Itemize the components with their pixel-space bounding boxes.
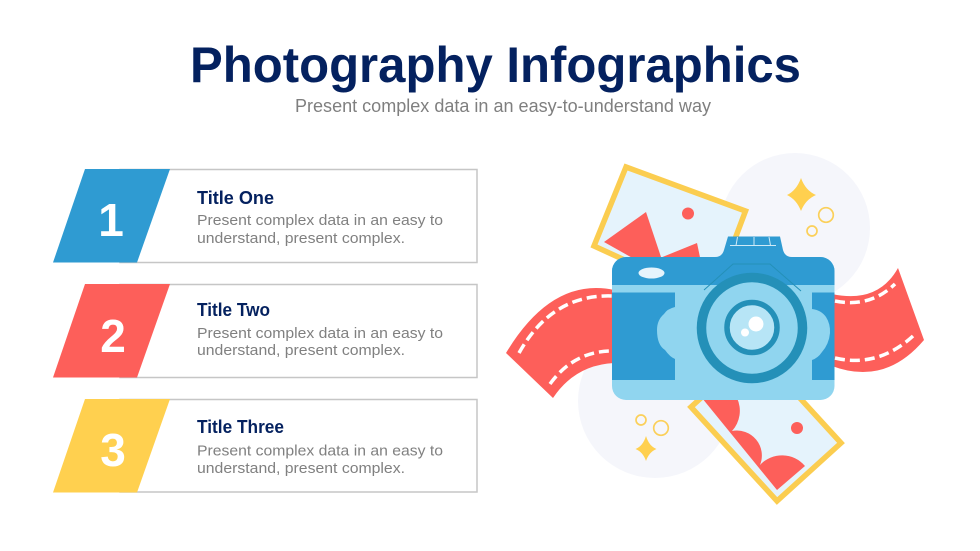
text block: item one: Present complex data in an easy to xyxy=(197,212,443,229)
heading: title three: Title Three xyxy=(197,417,284,437)
grip panel: right xyxy=(812,292,834,380)
panel: item two xyxy=(53,284,477,378)
text block: item two: understand, present complex. xyxy=(197,342,405,359)
camera top band xyxy=(612,257,834,285)
film strip: left xyxy=(506,288,614,398)
text block: item three xyxy=(197,442,443,477)
number tab: 2: 2 xyxy=(100,310,126,362)
camera top prism xyxy=(715,236,792,257)
text block: item one: understand, present complex. xyxy=(197,230,405,247)
camera body xyxy=(612,257,834,400)
heading: title two: Title Two xyxy=(197,300,270,320)
icon: lower sparkle xyxy=(636,415,668,461)
background circle: lower left xyxy=(578,324,732,478)
camera illustration xyxy=(506,153,924,501)
prism outline xyxy=(704,264,801,291)
number tab: 1 xyxy=(53,169,170,262)
panel: item one xyxy=(53,169,477,262)
text block: item two xyxy=(197,325,443,359)
flash button xyxy=(638,268,664,278)
title: Photography Infographics xyxy=(190,37,801,93)
heading: title one: Title One xyxy=(197,188,274,208)
number tab: 1: 1 xyxy=(98,194,124,246)
text block: item three: Present complex data in an easy to xyxy=(197,442,443,460)
icon: upper sparkle xyxy=(787,178,833,236)
panel: item three xyxy=(53,399,477,492)
camera xyxy=(612,236,834,400)
film strip: right xyxy=(832,268,924,372)
grip panel: left xyxy=(612,292,675,380)
number tab: 3 xyxy=(53,399,170,492)
number tab: 3: 3 xyxy=(100,424,126,476)
subtitle: Present complex data in an easy-to-understand way xyxy=(295,96,711,116)
text block: item two: Present complex data in an easy to xyxy=(197,325,443,342)
photo: lower xyxy=(691,349,841,501)
photo: upper xyxy=(594,167,746,300)
number tab: 2 xyxy=(53,284,170,378)
text block: item three: understand, present complex. xyxy=(197,460,405,477)
prism grid lines xyxy=(730,237,776,246)
lens xyxy=(702,278,802,378)
background circle: upper right xyxy=(720,153,870,303)
text block: item one xyxy=(197,212,443,247)
